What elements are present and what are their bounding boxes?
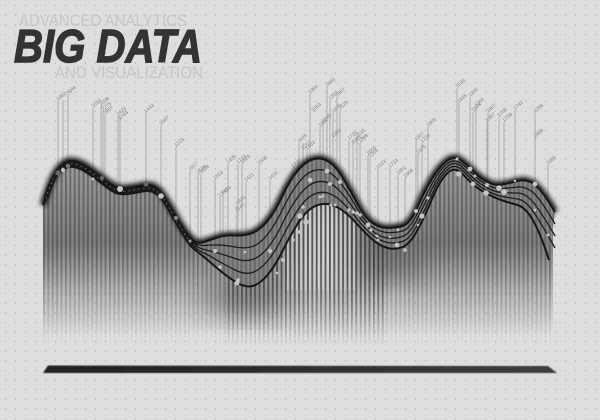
data label stems and values: 3946 [65, 85, 78, 97]
data label stems and values: 2038 [98, 96, 111, 108]
data label stems and values: 1964 [307, 84, 320, 96]
data label stems and values: 1645 [296, 133, 309, 145]
data label stems and values: 1629 [239, 154, 252, 166]
title block [14, 12, 203, 82]
data label stems and values: 1359 [367, 148, 380, 160]
data label stems and values: 1147 [234, 202, 247, 214]
data label stems and values: 1462 [274, 192, 287, 204]
data label stems and values: 1431 [267, 170, 280, 182]
data label stems and values: 1553 [212, 170, 225, 182]
blurred dark halo around the band [43, 158, 555, 243]
data label stems and values: 1936 [256, 155, 269, 167]
data label stems and values: 1534 [454, 78, 467, 90]
data label stems and values: 1358 [532, 103, 545, 115]
data label stems and values: 1917 [413, 131, 426, 143]
data label stems and values: 2423 [115, 106, 128, 118]
data label stems and values: 1733 [387, 158, 400, 170]
data label stems and values: 1882 [317, 117, 330, 129]
data label stems and values [55, 77, 558, 246]
data label stems and values: 1352 [327, 90, 340, 102]
data label stems and values: 1523 [337, 100, 350, 112]
wave band made of data strands [43, 150, 558, 295]
subtitle: advanced analytics: ADVANCED ANALYTICS [19, 12, 187, 30]
data label stems and values: 1835 [456, 93, 469, 105]
data label stems and values: 1868 [402, 168, 415, 180]
data label stems and values: 1984 [545, 155, 558, 167]
data label stems and values: 2275 [100, 101, 113, 113]
data label stems and values: 1843 [324, 77, 337, 89]
data label stems and values: 1675 [415, 144, 428, 156]
data label stems and values: 1463 [304, 140, 317, 152]
data label stems and values: 1888 [532, 128, 545, 140]
data label stems and values: 1933 [234, 195, 247, 207]
data label stems and values: 1907 [102, 105, 115, 117]
data label stems and values: 1945 [467, 87, 480, 99]
data label stems and values: 1951 [395, 165, 408, 177]
data point bubbles [56, 158, 550, 286]
data label stems and values: 1926 [220, 185, 233, 197]
data label stems and values: 1862 [55, 91, 68, 103]
data label stems and values: 1532 [354, 128, 367, 140]
data label stems and values: 1927 [280, 180, 293, 192]
data label stems and values: 1741 [217, 187, 230, 199]
data label stems and values: 1523 [375, 159, 388, 171]
data label stems and values: 1715 [346, 130, 359, 142]
strand 5: bottom edge [43, 167, 549, 286]
data label stems and values: 1867 [485, 103, 498, 115]
dotted highlights along the left band [46, 164, 196, 247]
data label stems and values: 1742 [512, 100, 525, 112]
subtitle: and visualization: AND VISUALIZATION [55, 63, 203, 82]
bottom baseline bar [43, 366, 557, 373]
data label stems and values: 1261 [350, 134, 363, 146]
data label stems and values: 1547 [158, 115, 171, 127]
data label stems and values: 1367 [484, 112, 497, 124]
data label stems and values: 1724 [419, 133, 432, 145]
data label stems and values: 1223 [173, 137, 186, 149]
data label stems and values: 1443 [143, 103, 156, 115]
data label stems and values: 1470 [330, 103, 343, 115]
strand 2 [190, 161, 555, 248]
data label stems and values: 1405 [225, 154, 238, 166]
data label stems and values: 1865 [425, 117, 438, 129]
data label stems and values: 1528 [470, 102, 483, 114]
data label stems and values: 1614 [90, 98, 103, 110]
data label stems and values: 1421 [243, 172, 256, 184]
data label stems and values: 1967 [334, 87, 347, 99]
heading: big data: BIG DATA [14, 20, 202, 72]
strand 3 [190, 163, 555, 261]
strand 1: top edge [43, 158, 555, 243]
data label stems and values: 1745 [320, 113, 333, 125]
data label stems and values: 1917 [187, 161, 200, 173]
data label stems and values: 1737 [290, 158, 303, 170]
area below the wave: soft shading and vertical stripes [43, 168, 553, 342]
data label stems and values: 1360 [473, 97, 486, 109]
data label stems and values: 1758 [501, 112, 514, 124]
data label stems and values: 1883 [330, 128, 343, 140]
data label stems and values: 2536 [195, 164, 208, 176]
strand 4 [190, 166, 555, 273]
data label stems and values: 1654 [365, 145, 378, 157]
dark fill along the thin left part of the band [46, 164, 196, 247]
data label stems and values: 1257 [300, 140, 313, 152]
band interior fill [43, 158, 555, 286]
stripes inside the band [199, 159, 552, 286]
data label stems and values: 1889 [357, 133, 370, 145]
data label stems and values: 1712 [235, 154, 248, 166]
data label stems and values: 1783 [117, 110, 130, 122]
data label stems and values: 1828 [198, 164, 211, 176]
data label stems and values: 1765 [496, 107, 509, 119]
data label stems and values: 1053 [310, 102, 323, 114]
